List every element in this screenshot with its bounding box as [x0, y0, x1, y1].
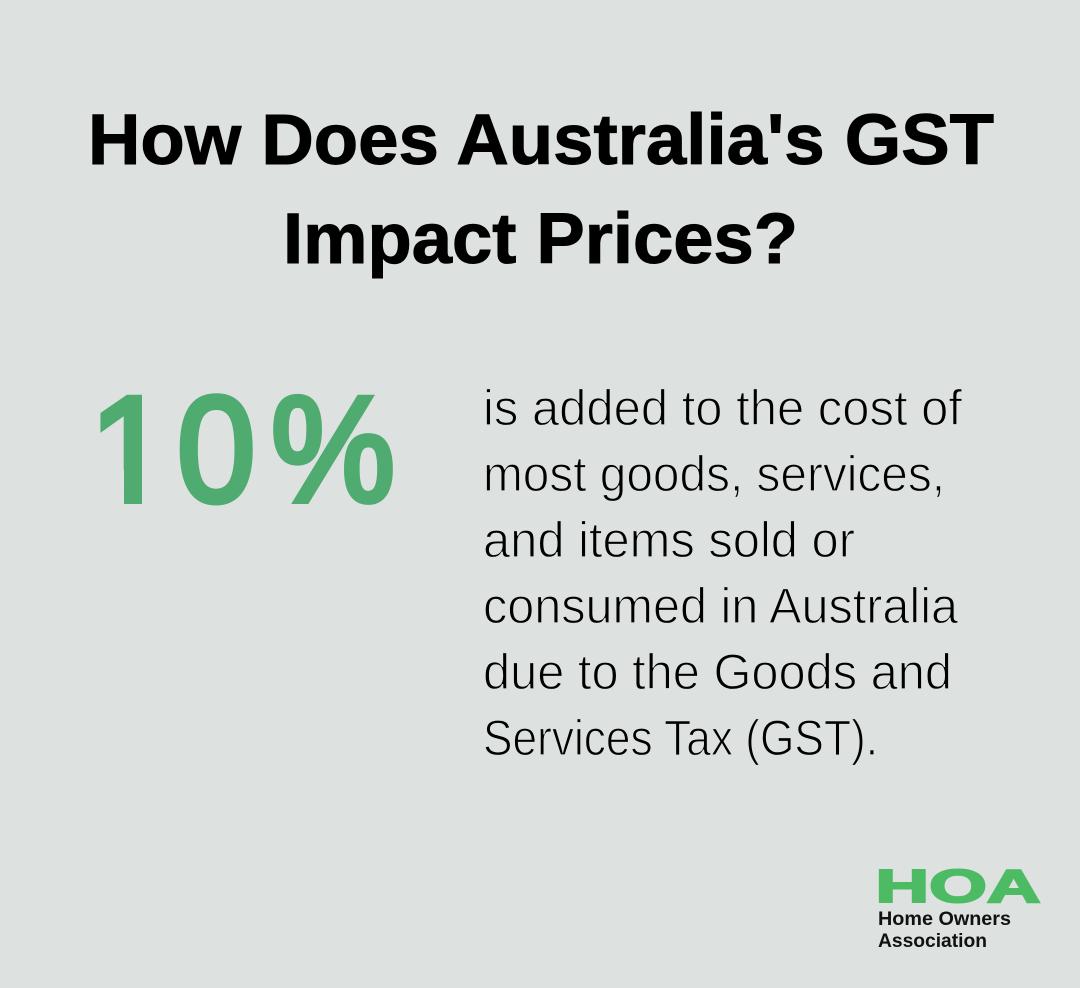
stat description	[483, 380, 962, 766]
logo wordmark line 1: Home Owners	[878, 908, 1011, 930]
stat description: Services Tax (GST).	[483, 710, 878, 766]
stat description: is added to the cost of	[483, 380, 962, 436]
stat description: due to the Goods and	[483, 644, 952, 700]
infographic canvas	[92, 112, 1041, 947]
title: Impact Prices?	[283, 200, 798, 279]
stat description: and items sold or	[483, 512, 855, 568]
title	[88, 101, 994, 279]
title: How Does Australia's GST	[88, 101, 994, 180]
big stat: 10%: %	[271, 365, 395, 533]
logo wordmark line 2: Association	[878, 930, 987, 952]
big stat: 10%: 1	[89, 365, 172, 533]
stat description: most goods, services,	[483, 446, 945, 502]
big stat: 10%: 0	[177, 365, 255, 533]
big stat: 10%	[100, 393, 393, 506]
stat description: consumed in Australia	[483, 578, 958, 634]
logo mark: HOA: HOA	[876, 860, 1040, 912]
logo: Home Owners Association	[876, 860, 1040, 952]
